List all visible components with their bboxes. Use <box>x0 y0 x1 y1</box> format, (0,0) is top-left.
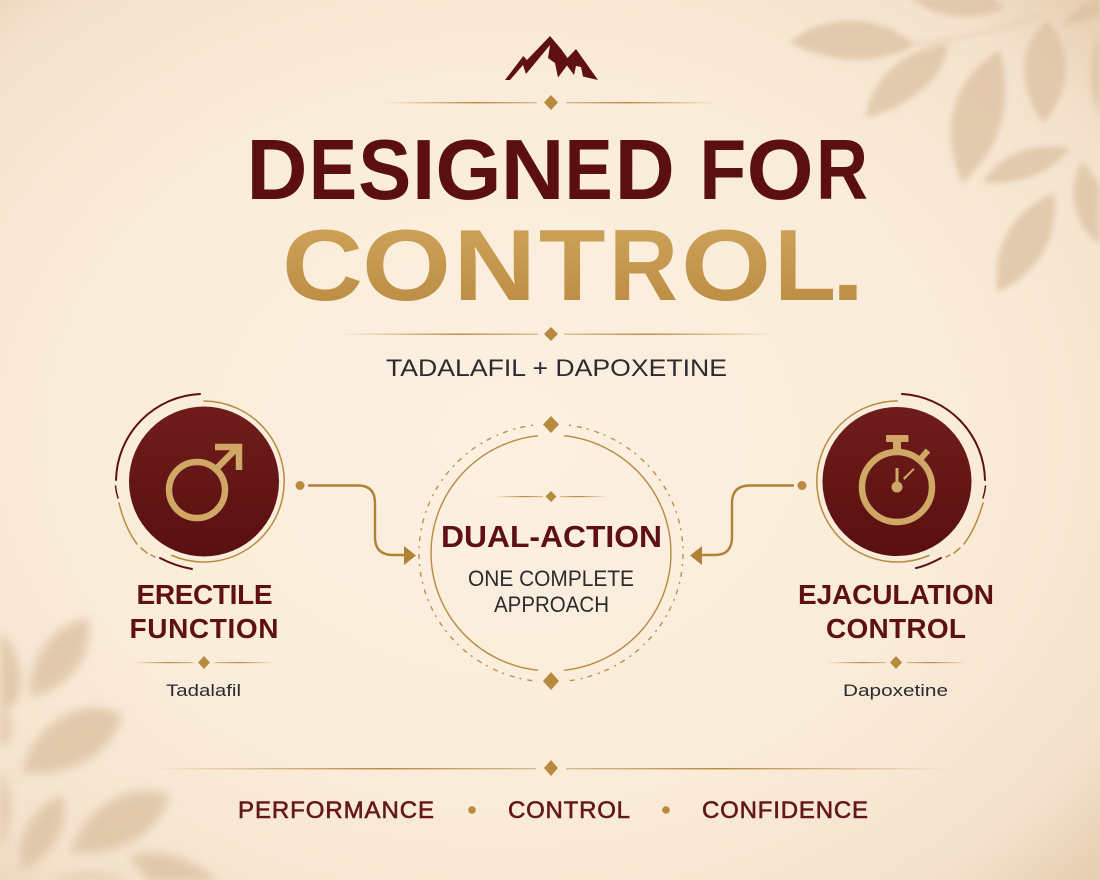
heading: ERECTILE <box>136 579 272 610</box>
title: S <box>358 123 411 218</box>
panel: erectile function <box>116 394 284 700</box>
title: O <box>681 210 771 322</box>
arrow: left to centre <box>296 481 416 565</box>
decorative rings <box>116 394 284 569</box>
drug label: Dapoxetine <box>843 681 948 700</box>
tagline: ONE COMPLETE <box>468 566 634 591</box>
footer keywords <box>238 797 868 824</box>
footer divider <box>150 760 952 776</box>
decorative rings <box>817 394 986 568</box>
title divider <box>340 327 776 341</box>
arrow: right to centre <box>690 481 806 565</box>
heading: FUNCTION <box>130 613 278 644</box>
panel: dual-action centre <box>419 416 683 690</box>
footer keywords: CONFIDENCE <box>702 797 868 824</box>
panel: ejaculation control <box>798 394 994 700</box>
title: E <box>565 123 613 218</box>
tagline: APPROACH <box>494 592 609 617</box>
title: T <box>539 210 606 322</box>
title: D <box>615 123 675 218</box>
icon: male symbol <box>169 447 239 518</box>
title: C <box>282 210 363 322</box>
title: O <box>362 210 451 322</box>
title: R <box>816 123 868 218</box>
tagline <box>468 566 634 617</box>
diamond top <box>543 416 559 433</box>
title: R <box>609 210 678 322</box>
outer dotted ring <box>419 425 683 681</box>
heading <box>130 579 278 644</box>
heading: CONTROL <box>826 613 966 644</box>
icon: maroon disc <box>129 406 279 556</box>
title: L <box>774 210 836 322</box>
diamond bottom <box>543 672 559 690</box>
top ornament divider <box>385 95 718 110</box>
heading <box>798 579 994 644</box>
divider <box>826 656 967 669</box>
title: I <box>412 123 435 218</box>
heading: EJACULATION <box>798 579 994 610</box>
divider <box>133 656 275 669</box>
title: E <box>309 123 357 218</box>
title: O <box>747 123 814 218</box>
inner ring <box>431 436 671 670</box>
icon: mountain logo <box>505 36 598 80</box>
footer keywords: PERFORMANCE <box>238 797 434 824</box>
icon: stopwatch <box>862 435 932 522</box>
decorative leaves: top right <box>790 0 1100 292</box>
heading: DUAL-ACTION <box>441 519 662 554</box>
title: F <box>699 123 746 218</box>
title <box>246 123 868 322</box>
title: N <box>453 210 536 322</box>
title: . <box>831 210 865 322</box>
footer keywords: CONTROL <box>508 797 630 824</box>
title: D <box>246 123 308 218</box>
icon: maroon disc <box>822 407 972 556</box>
subtitle: TADALAFIL + DAPOXETINE <box>386 355 727 382</box>
inner divider <box>495 491 608 502</box>
drug label: Tadalafil <box>166 681 241 700</box>
title: G <box>435 123 502 218</box>
title: N <box>501 123 565 218</box>
decorative leaves: bottom left <box>0 618 220 880</box>
